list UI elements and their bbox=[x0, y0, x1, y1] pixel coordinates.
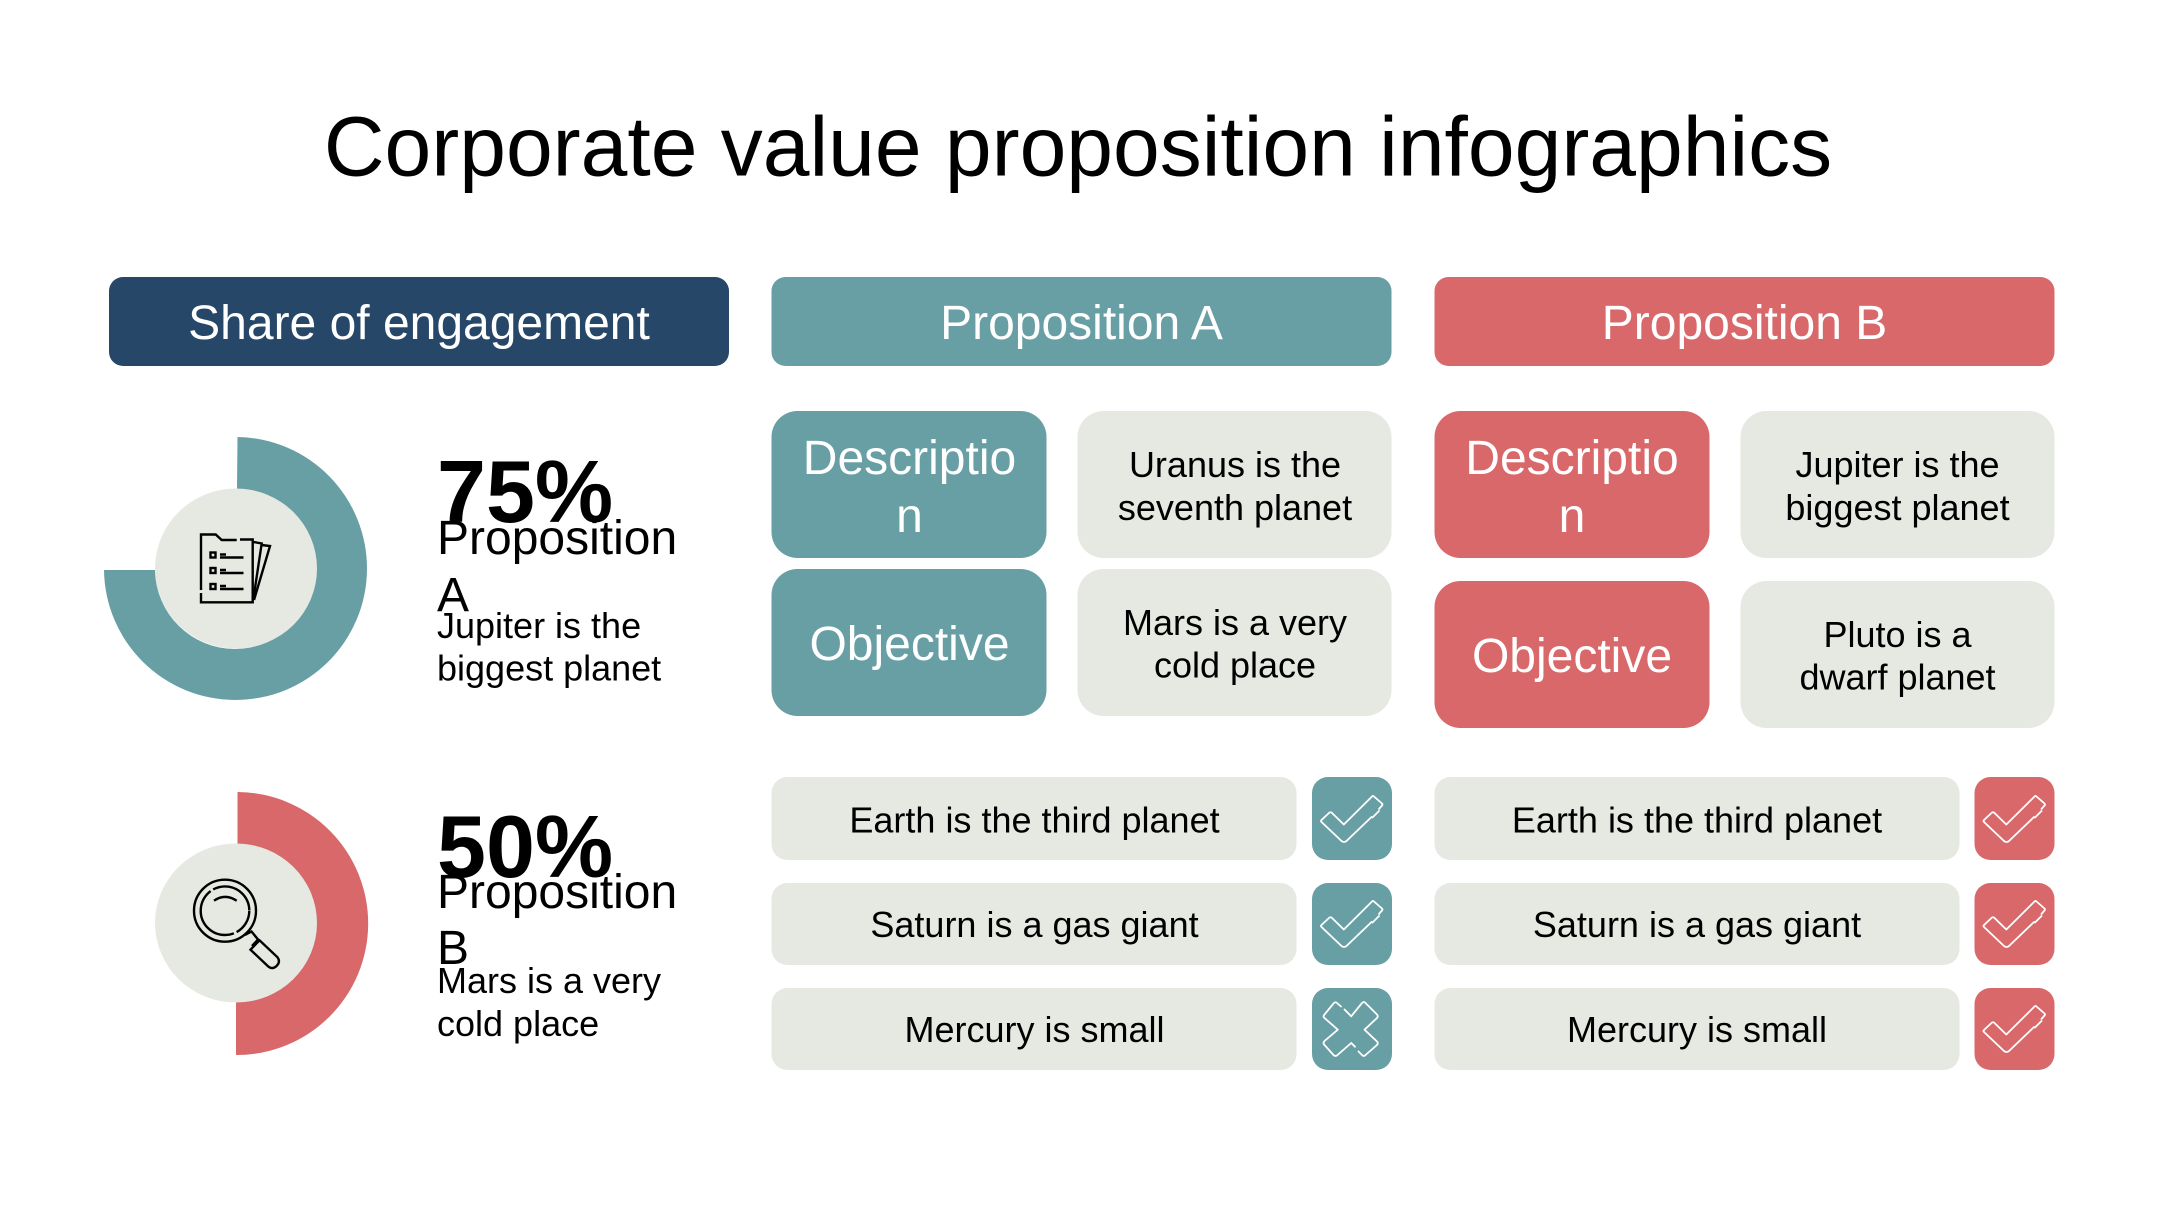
row B: Saturn: Saturn is a gas giant bbox=[1533, 904, 1861, 945]
header: Share of engagement: Share of engagement bbox=[188, 297, 650, 350]
icon: check B2 bbox=[1974, 883, 2054, 965]
row B: Mercury: Mercury is small bbox=[1567, 1009, 1827, 1050]
icon: magnifying glass bbox=[194, 880, 279, 968]
donut chart: 50% bbox=[155, 792, 368, 1055]
cell: Jupiter text bbox=[1740, 411, 2054, 558]
cell: Pluto text: Pluto is a bbox=[1823, 614, 1973, 655]
cell: Uranus text: seventh planet bbox=[1118, 487, 1352, 528]
icon: check B3 bbox=[1974, 988, 2054, 1070]
cell: Jupiter text: biggest planet bbox=[1785, 487, 2010, 528]
text: Jupiter is the biggest planet: Jupiter is the bbox=[437, 605, 641, 646]
cell: Mars text: cold place bbox=[1154, 644, 1316, 686]
stat: 75%: 75% bbox=[437, 442, 613, 541]
stat: 50%: 50% bbox=[437, 797, 613, 896]
header: Proposition B bbox=[1434, 277, 2054, 366]
row A: Earth: Earth is the third planet bbox=[849, 800, 1220, 840]
label: Proposition A: A bbox=[437, 569, 469, 622]
header: Proposition A bbox=[772, 277, 1392, 366]
row A: Saturn: Saturn is a gas giant bbox=[870, 904, 1199, 945]
cell: Mars text: Mars is a very bbox=[1123, 602, 1347, 643]
row B: Mercury bbox=[1434, 988, 1960, 1070]
label: Proposition A: Proposition bbox=[437, 512, 677, 565]
cell: Description B bbox=[1434, 411, 1710, 558]
label: Proposition B: B bbox=[437, 922, 469, 975]
cell: Uranus text bbox=[1078, 411, 1392, 558]
panel: share of engagement 50% bbox=[155, 792, 677, 1055]
icon: check B1 bbox=[1974, 777, 2054, 860]
icon: check A2 bbox=[1312, 883, 1392, 965]
icon: documents checklist bbox=[201, 534, 270, 602]
icon: cross A3 bbox=[1312, 988, 1392, 1070]
header: Proposition A: Proposition A bbox=[940, 297, 1223, 350]
row B: Earth: Earth is the third planet bbox=[1512, 800, 1882, 840]
cell: Description A: n bbox=[896, 490, 923, 543]
title: Corporate value proposition infographics bbox=[324, 100, 1832, 194]
cell: Mars text bbox=[1078, 569, 1392, 716]
cell: Uranus text: Uranus is the bbox=[1129, 444, 1341, 485]
cell: Objective A: Objective bbox=[809, 618, 1010, 671]
row A: Mercury: Mercury is small bbox=[904, 1009, 1165, 1050]
text: Mars is a very cold place: cold place bbox=[437, 1003, 599, 1044]
row A: Earth bbox=[772, 777, 1296, 860]
header: Share of engagement bbox=[109, 277, 729, 366]
header: Proposition B: Proposition B bbox=[1602, 297, 1887, 350]
cell: Pluto text: dwarf planet bbox=[1799, 656, 1996, 698]
cell: Objective A bbox=[772, 569, 1046, 716]
cell: Jupiter text: Jupiter is the bbox=[1795, 444, 2000, 485]
row A: Mercury bbox=[772, 988, 1296, 1070]
text: Jupiter is the biggest planet: biggest planet bbox=[437, 648, 661, 688]
cell: Objective B: Objective bbox=[1472, 630, 1672, 683]
cell: Description A bbox=[772, 411, 1046, 558]
row B: Saturn bbox=[1434, 883, 1960, 965]
panel: share of engagement 75% bbox=[104, 437, 677, 700]
label: Proposition B: Proposition bbox=[437, 866, 677, 919]
cell: Description B: Descriptio bbox=[1465, 432, 1679, 485]
row A: Saturn bbox=[772, 883, 1296, 965]
text: Mars is a very cold place: Mars is a very bbox=[437, 960, 661, 1001]
cell: Description A: Descriptio bbox=[803, 432, 1016, 485]
row B: Earth bbox=[1434, 777, 1960, 860]
icon: check A1 bbox=[1312, 777, 1392, 860]
cell: Description B: n bbox=[1559, 490, 1585, 543]
donut chart: 75% bbox=[104, 437, 367, 700]
cell: Pluto text bbox=[1740, 581, 2054, 728]
cell: Objective B bbox=[1434, 581, 1710, 728]
